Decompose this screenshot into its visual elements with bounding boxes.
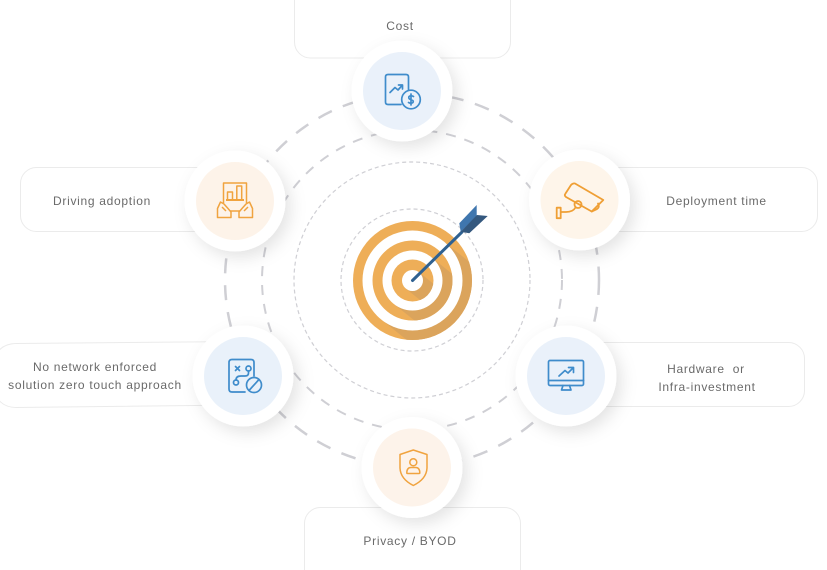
panel: Driving adoption label — [20, 168, 240, 232]
panel: Driving adoption label: Driving adoption — [53, 194, 151, 208]
panel: Cost label: Cost — [386, 19, 414, 33]
panel: Deployment time label — [590, 168, 818, 232]
icon: shield with user — [400, 450, 427, 486]
dashed concentric rings — [225, 93, 599, 467]
panel: Hardware label: Hardware or — [667, 362, 745, 376]
panel: No network label — [0, 342, 240, 408]
panel: Hardware label: Infra-investment — [658, 380, 756, 394]
icon: monitor with rising chart — [548, 360, 584, 390]
node: No network — [192, 326, 294, 426]
icon: route plan with no symbol — [229, 360, 262, 392]
panel: Deployment time label: Deployment time — [666, 194, 767, 208]
panel: Privacy label: Privacy / BYOD — [363, 534, 457, 548]
node: Cost — [352, 40, 452, 142]
panel: No network label: No network enforced — [33, 360, 157, 374]
panel: Privacy label — [304, 508, 520, 570]
icon: report with dollar — [386, 74, 420, 109]
node: Privacy — [362, 417, 462, 518]
icon: hands holding chart — [218, 183, 252, 218]
node: Driving adoption — [184, 150, 286, 252]
node: Hardware — [516, 326, 616, 426]
node: Deployment time — [529, 150, 630, 250]
target with arrow — [353, 205, 490, 342]
icon: security camera — [557, 183, 603, 218]
panel: No network label: solution zero touch approach — [8, 378, 182, 392]
panel: Cost label — [294, 0, 510, 58]
panel: Hardware label — [580, 342, 804, 406]
